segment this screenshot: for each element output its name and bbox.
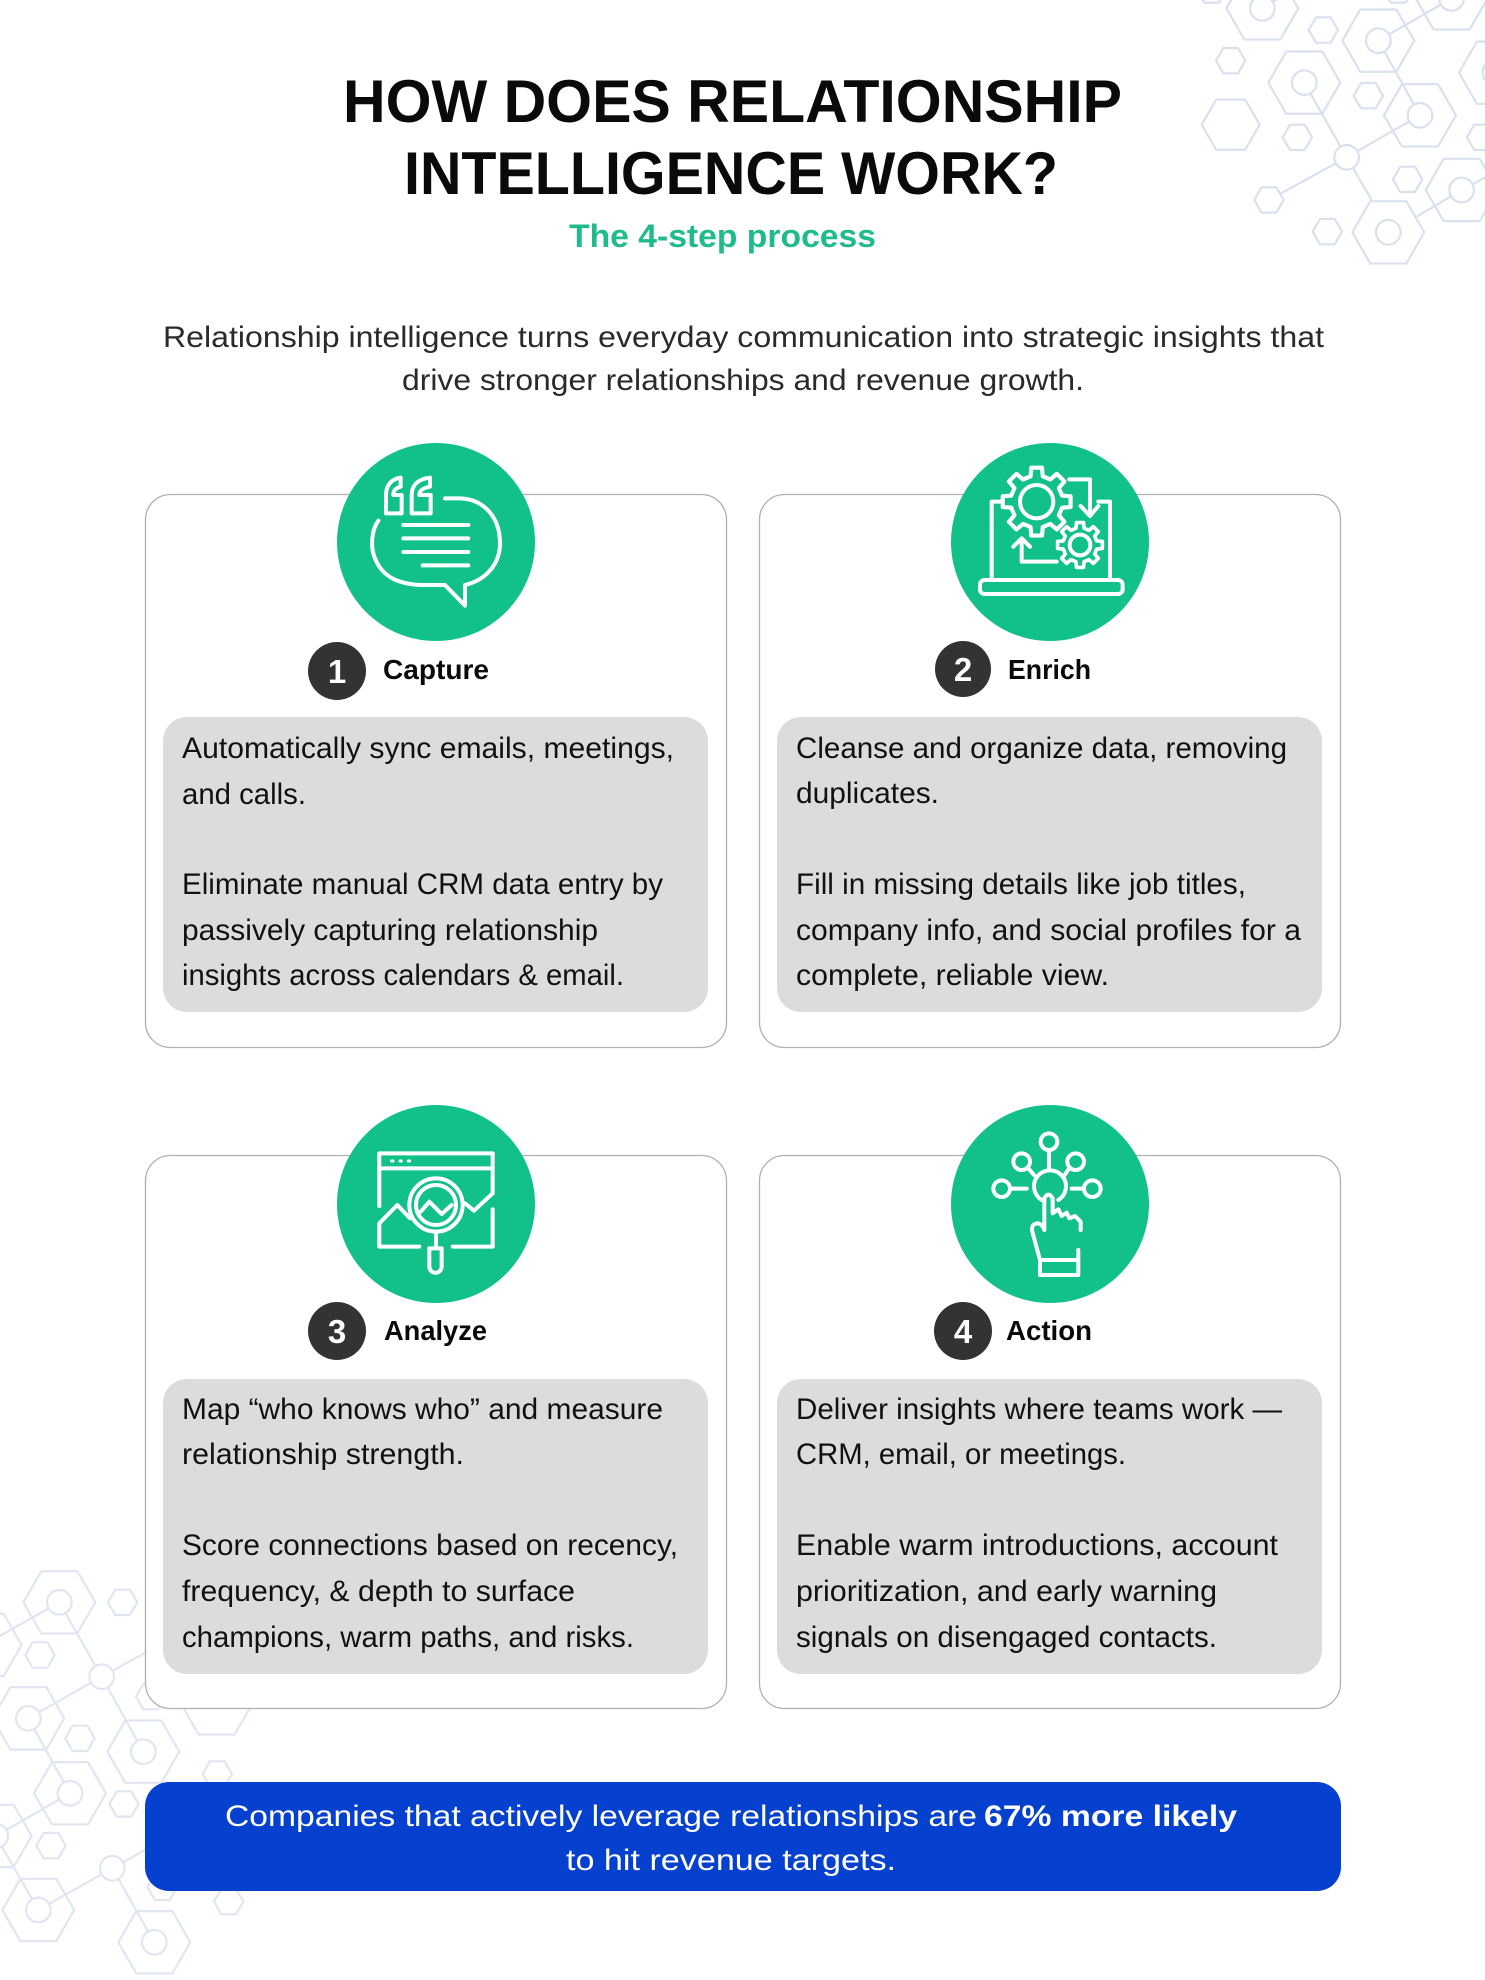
title: INTELLIGENCE WORK?: [404, 140, 1058, 207]
text box: analyze description: relationship strength.: [182, 1438, 464, 1471]
label: analyze: Analyze: [384, 1315, 487, 1346]
badge: number 4: 4: [954, 1313, 973, 1350]
label: capture: Capture: [383, 654, 489, 685]
text box: enrich description: complete, reliable view.: [796, 959, 1109, 992]
text box: capture description: passively capturing relationship: [182, 914, 598, 947]
text box: enrich description: duplicates.: [796, 777, 939, 810]
subtitle: The 4-step process: [569, 218, 876, 254]
text box: capture description: Eliminate manual CRM data entry by: [182, 868, 663, 901]
panel: step 4 action: [760, 1105, 1340, 1708]
panel: step 1 capture: [146, 443, 726, 1048]
text box: action description: Deliver insights where teams work —: [796, 1393, 1282, 1426]
title: HOW DOES RELATIONSHIP: [343, 68, 1122, 135]
text box: capture description: insights across calendars & email.: [182, 959, 624, 992]
text box: action description: [777, 1379, 1322, 1674]
text box: analyze description: frequency, & depth to surface: [182, 1575, 575, 1608]
icon: laptop with gears: [951, 443, 1149, 641]
icon: hand touching network node: [951, 1105, 1149, 1303]
text box: capture description: Automatically sync emails, meetings,: [182, 732, 674, 765]
intro text: Relationship intelligence turns everyday communication into strategic insights that: [163, 321, 1325, 354]
callout banner: to hit revenue targets.: [566, 1844, 896, 1877]
badge: number 2: 2: [954, 651, 972, 688]
text box: capture description: [163, 717, 708, 1012]
badge: number 3: [308, 1302, 366, 1360]
title: [343, 68, 1122, 207]
text box: action description: CRM, email, or meetings.: [796, 1438, 1126, 1471]
text box: analyze description: Map “who knows who” and measure: [182, 1393, 663, 1426]
label: action: Action: [1006, 1315, 1092, 1346]
badge: number 4: [934, 1302, 992, 1360]
text box: enrich description: company info, and social profiles for a: [796, 914, 1301, 947]
badge: number 2: [935, 641, 991, 697]
text box: enrich description: Fill in missing details like job titles,: [796, 868, 1246, 901]
text box: analyze description: Score connections based on recency,: [182, 1529, 678, 1562]
text box: enrich description: [777, 717, 1322, 1012]
text box: action description: signals on disengaged contacts.: [796, 1621, 1217, 1654]
badge: number 3: 3: [328, 1313, 346, 1350]
text box: analyze description: [163, 1379, 708, 1674]
text box: analyze description: champions, warm paths, and risks.: [182, 1621, 634, 1654]
decoration: hexagon network bottom left: [0, 1571, 253, 1973]
text box: action description: Enable warm introductions, account: [796, 1529, 1279, 1562]
text box: enrich description: Cleanse and organize data, removing: [796, 732, 1287, 765]
panel: step 3 analyze: [146, 1105, 726, 1708]
callout banner: 67% more likely: [984, 1800, 1237, 1833]
intro text: [163, 321, 1325, 397]
panel: step 2 enrich: [760, 443, 1340, 1048]
label: enrich: Enrich: [1008, 654, 1091, 685]
badge: number 1: [308, 642, 366, 700]
text box: action description: prioritization, and early warning: [796, 1575, 1217, 1608]
icon: magnifier over chart window: [337, 1105, 535, 1303]
callout banner: [145, 1782, 1341, 1891]
badge: number 1: 1: [328, 653, 346, 690]
text box: capture description: and calls.: [182, 778, 306, 811]
decoration: hexagon network top right: [1197, 0, 1485, 263]
callout banner: Companies that actively leverage relationships are: [225, 1800, 977, 1833]
intro text: drive stronger relationships and revenue growth.: [402, 364, 1084, 397]
icon: speech bubble with quotes: [337, 443, 535, 641]
